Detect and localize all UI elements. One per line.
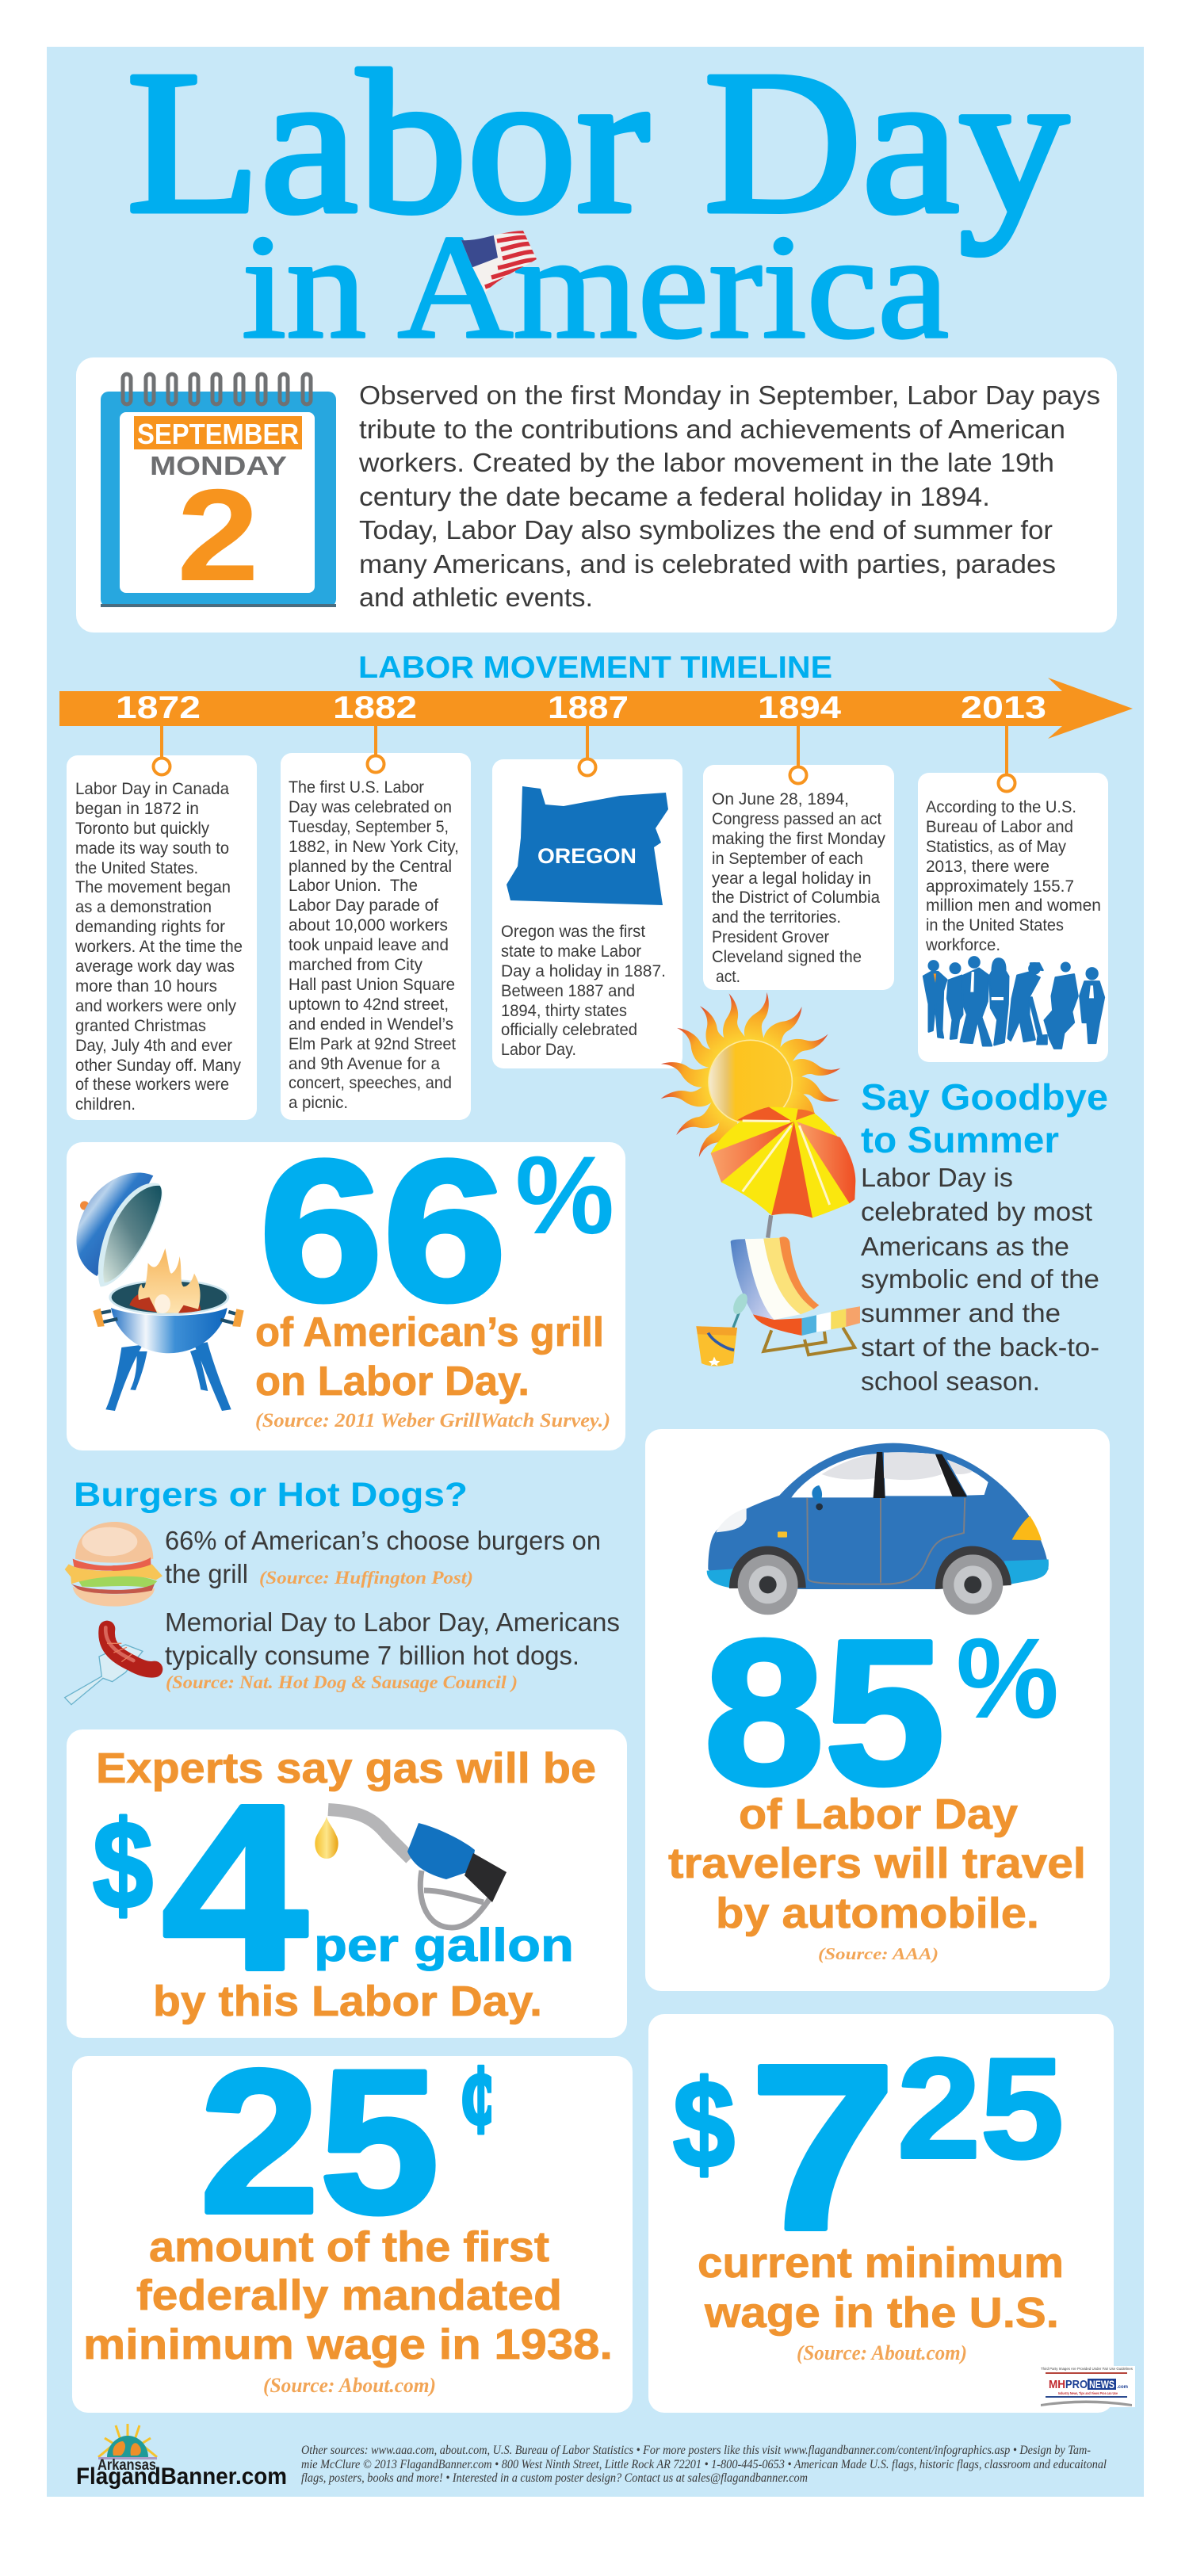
panel: current minimum wage stat <box>648 2014 1114 2413</box>
say goodbye to summer heading: to Summer <box>861 1119 1059 1160</box>
footer sources text: Other sources: www.aaa.com, about.com, U.S. Bureau of Labor Statistics • For more posters like this visit www.flagandbanner.com/content/infographics.asp • Design by Tam- <box>301 2444 1091 2457</box>
gas caption: by this Labor Day. <box>153 1978 542 2025</box>
logo: MHProNews badge: Industry News, Tips and Views Pros can Use <box>1058 2391 1118 2395</box>
big number $4: 4 <box>162 1756 309 2020</box>
logo: MHProNews badge: NEWS <box>1089 2378 1114 2391</box>
burger text: the grill <box>165 1559 248 1588</box>
intro text <box>358 380 1100 612</box>
panel: timeline card 1882: took unpaid leave and <box>289 935 449 954</box>
gas caption: per gallon <box>314 1920 574 1971</box>
say goodbye text block: Labor Day is <box>861 1163 1013 1192</box>
panel: timeline card 1872: more than 10 hours <box>75 977 217 996</box>
panel: timeline card 2013: million men and women <box>926 896 1101 915</box>
panel: intro <box>76 357 1117 633</box>
car caption: by automobile. <box>716 1890 1039 1937</box>
say goodbye text block: Americans as the <box>861 1232 1069 1261</box>
icon: worker silhouettes <box>923 957 1104 1049</box>
panel: timeline card 1882: planned by the Central <box>289 857 452 876</box>
panel: timeline card 1887: Between 1887 and <box>501 981 635 1000</box>
gas headline: Experts say gas will be <box>96 1745 596 1792</box>
logo: MHProNews badge: .com <box>1117 2385 1128 2390</box>
panel: timeline card 1894: the District of Columbia <box>712 888 880 907</box>
current wage caption: (Source: About.com) <box>797 2341 967 2364</box>
big number 25 cents: 25 <box>200 2027 439 2256</box>
car caption: (Source: AAA) <box>818 1944 939 1963</box>
icon: hot dog on fork <box>65 1627 155 1705</box>
say goodbye to summer heading <box>861 1076 1108 1160</box>
panel: timeline card 1887: state to make Labor <box>501 942 641 961</box>
grill caption: of American’s grill <box>255 1309 604 1355</box>
icon: burger <box>65 1522 162 1607</box>
panel: timeline card 1894: year a legal holiday in <box>712 869 871 888</box>
logo: Arkansas Flag and Banner <box>76 2424 287 2490</box>
panel: timeline card 1872: children. <box>75 1095 136 1114</box>
panel: timeline card 1882: uptown to 42nd street, <box>289 995 449 1014</box>
wage caption: amount of the first <box>149 2223 549 2271</box>
icon: american flag <box>461 231 537 292</box>
panel: timeline card 1872: Day, July 4th and ever <box>75 1036 232 1055</box>
panel: timeline card 1887: officially celebrated <box>501 1020 637 1039</box>
panel: timeline card 1894: and the territories. <box>712 908 841 927</box>
say goodbye text block: celebrated by most <box>861 1197 1092 1226</box>
icon: calendar: 2 <box>177 462 259 608</box>
panel: timeline card 1894: On June 28, 1894, <box>712 789 849 808</box>
icon: sun <box>658 990 843 1166</box>
burger text: 66% of American’s choose burgers on <box>165 1526 601 1555</box>
panel: timeline card 1894: President Grover <box>712 927 829 946</box>
panel: timeline card 1882: a picnic. <box>289 1093 348 1112</box>
big number 25 cents: ¢ <box>461 2045 499 2153</box>
panel: timeline card 1887: Labor Day. <box>501 1040 576 1059</box>
timeline years: 1872 <box>116 690 201 725</box>
big number 85% <box>704 1598 1059 1828</box>
icon: logo sun globe <box>98 2424 157 2459</box>
icon: oregon state map <box>507 786 668 905</box>
intro text: Today, Labor Day also symbolizes the end of summer for <box>359 515 1053 545</box>
burger text: (Source: Huffington Post) <box>259 1568 473 1588</box>
panel: timeline card 1872: average work day was <box>75 957 235 976</box>
panel: timeline card 1882: Tuesday, September 5, <box>289 817 449 836</box>
timeline arrow <box>59 678 1133 739</box>
panel: timeline card 2013: Bureau of Labor and <box>926 817 1073 836</box>
wage caption: federally mandated <box>136 2272 562 2319</box>
say goodbye to summer heading: Say Goodbye <box>861 1076 1108 1118</box>
big number $7.25: 25 <box>897 2029 1064 2188</box>
icon: umbrella <box>711 1107 855 1238</box>
panel: timeline card 2013: in the United States <box>926 915 1064 934</box>
panel: timeline card 2013: 2013, there were <box>926 857 1049 876</box>
icon: calendar: SEPTEMBER <box>137 418 299 450</box>
panel: timeline card 1872: The movement began <box>75 877 231 896</box>
logo: MHProNews badge: PRO <box>1065 2378 1088 2391</box>
panel: timeline card 1872: made its way south to <box>75 839 229 858</box>
say goodbye text block: start of the back-to- <box>861 1332 1099 1362</box>
hot dog text: Memorial Day to Labor Day, Americans <box>165 1607 620 1637</box>
icon: beach sun, umbrella, chair, bucket <box>658 990 860 1366</box>
timeline years: 2013 <box>961 690 1046 725</box>
car caption: of Labor Day <box>739 1791 1018 1838</box>
timeline years: 1887 <box>548 690 629 725</box>
panel: timeline card 1882: 1882, in New York City, <box>289 837 459 856</box>
timeline years <box>116 690 1046 725</box>
timeline heading: LABOR MOVEMENT TIMELINE <box>358 651 832 685</box>
panel: gas price stat <box>67 1729 627 2038</box>
hot dog text: typically consume 7 billion hot dogs. <box>165 1641 579 1670</box>
big number $7.25 <box>673 2016 1064 2280</box>
panel: timeline card 1882: Hall past Union Square <box>289 975 455 994</box>
current wage caption: wage in the U.S. <box>704 2289 1059 2337</box>
big number 66%: 66 <box>259 1118 507 1343</box>
icon: grill <box>76 1172 244 1411</box>
icon: car <box>707 1443 1049 1615</box>
panel: timeline card 1894 <box>703 765 894 990</box>
panel: timeline card 1887 <box>492 759 682 1068</box>
timeline years: 1882 <box>333 690 417 725</box>
big number $7.25: $ <box>673 2055 735 2194</box>
big number $7.25: 7 <box>749 2016 897 2280</box>
footer sources text <box>301 2444 1107 2485</box>
footer sources text: flags, posters, books and more! • Interested in a custom poster design? Contact us at sales@flagandbanner.com <box>301 2471 808 2485</box>
panel: timeline card 1882: concert, speeches, and <box>289 1073 452 1092</box>
panel: timeline card 1887: Day a holiday in 1887. <box>501 961 666 980</box>
heading: Burgers or Hot Dogs? <box>74 1476 468 1514</box>
panel: timeline card 1872: workers. At the time the <box>75 937 243 956</box>
panel: timeline card 1894: act. <box>716 967 740 986</box>
panel: timeline card 1882 <box>281 753 471 1120</box>
grill caption: on Labor Day. <box>255 1359 530 1405</box>
say goodbye text block <box>861 1163 1099 1396</box>
panel: timeline card 1894: Cleveland signed the <box>712 947 862 966</box>
panel: timeline card 2013: Statistics, as of May <box>926 837 1066 856</box>
logo: MHProNews badge: Third Party Images Are Provided Under Fair Use Guidelines <box>1041 2367 1134 2371</box>
panel: timeline card 2013: workforce. <box>925 935 1000 954</box>
intro text: century the date became a federal holiday in 1894. <box>359 482 990 511</box>
panel: grill stat <box>67 1118 625 1450</box>
logo: Arkansas Flag and Banner: Arkansas <box>97 2457 156 2474</box>
gas caption <box>153 1920 574 2025</box>
grill caption <box>255 1309 610 1431</box>
logo: MHProNews badge: MH <box>1049 2378 1065 2391</box>
panel: timeline card 1872: the United States. <box>75 858 198 877</box>
panel: timeline card 1872 <box>67 755 257 1120</box>
intro text: and athletic events. <box>359 583 593 612</box>
panel: timeline card 1872: demanding rights for <box>75 917 225 936</box>
big number $4 <box>93 1756 309 2020</box>
title <box>127 29 1069 369</box>
panel: timeline card 1887: 1894, thirty states <box>501 1001 627 1020</box>
timeline years: 1894 <box>758 690 842 725</box>
title: Labor Day <box>127 29 1069 255</box>
timeline connectors and markers <box>154 726 1015 791</box>
panel: timeline card 1872: Labor Day in Canada <box>75 779 229 798</box>
panel: timeline card 2013 <box>918 773 1108 1062</box>
panel: timeline card 1882: about 10,000 workers <box>289 915 448 934</box>
burger text <box>165 1526 601 1588</box>
icon: sand bucket <box>696 1291 751 1366</box>
panel: timeline card 1894: in September of each <box>712 849 863 868</box>
panel: timeline card 1887: Oregon was the first <box>501 922 645 941</box>
intro text: Observed on the first Monday in September, Labor Day pays <box>359 380 1100 410</box>
icon: oregon state map: OREGON <box>537 844 637 868</box>
big number $4: $ <box>93 1796 153 1935</box>
panel: timeline card 1882: Labor Union. The <box>289 876 418 895</box>
icon: beach chair <box>731 1236 860 1355</box>
panel: timeline card 1872: began in 1872 in <box>75 799 199 818</box>
title: in America <box>242 204 949 369</box>
hot dog text <box>165 1607 620 1692</box>
panel: timeline card 1882: Day was celebrated on <box>289 797 452 816</box>
logo: Arkansas Flag and Banner: FlagandBanner.com <box>76 2463 287 2490</box>
intro text: workers. Created by the labor movement in the late 19th <box>358 448 1054 477</box>
hot dog text: (Source: Nat. Hot Dog & Sausage Council ) <box>166 1672 518 1692</box>
icon: calendar: MONDAY <box>150 451 287 480</box>
panel: timeline card 1882: Labor Day parade of <box>289 896 438 915</box>
big number 25 cents <box>205 2064 491 2216</box>
panel: car stat <box>645 1429 1110 1991</box>
big number 85%: % <box>956 1615 1059 1742</box>
panel: timeline card 1872: other Sunday off. Many <box>75 1056 241 1075</box>
panel: timeline card 2013: According to the U.S. <box>926 797 1076 816</box>
icon: gas nozzle <box>315 1810 507 1928</box>
panel: timeline card 1872: as a demonstration <box>75 897 212 916</box>
panel: timeline card 1882: and 9th Avenue for a <box>289 1054 440 1073</box>
panel: timeline card 1894: making the first Monday <box>712 829 885 848</box>
logo: MHProNews badge <box>1039 2366 1135 2407</box>
say goodbye text block: symbolic end of the <box>861 1264 1099 1294</box>
panel: burgers or hot dogs <box>65 1476 620 1705</box>
panel: timeline card 1882: Elm Park at 92nd Street <box>289 1034 456 1053</box>
panel: timeline card 1872: and workers were only <box>75 996 236 1015</box>
wage caption: (Source: About.com) <box>263 2374 436 2397</box>
panel: first minimum wage stat <box>72 2027 633 2413</box>
car caption <box>668 1791 1086 1963</box>
grill caption: (Source: 2011 Weber GrillWatch Survey.) <box>255 1410 610 1431</box>
panel: timeline card 1894: Congress passed an act <box>712 809 881 828</box>
panel: timeline card 1882: The first U.S. Labor <box>289 778 424 797</box>
panel: timeline card 1872: Toronto but quickly <box>75 819 209 838</box>
panel: timeline card 1882: marched from City <box>289 955 422 974</box>
panel: timeline card 1872: granted Christmas <box>75 1016 206 1035</box>
say goodbye text block: school season. <box>861 1366 1040 1396</box>
big number 85%: 85 <box>704 1598 945 1828</box>
panel: timeline card 1882: and ended in Wendel’s <box>289 1015 453 1034</box>
big number 66% <box>259 1118 614 1343</box>
intro text: many Americans, and is celebrated with parties, parades <box>359 549 1056 579</box>
panel: timeline card 2013: approximately 155.7 <box>926 877 1074 896</box>
footer sources text: mie McClure © 2013 FlagandBanner.com • 800 West Ninth Street, Little Rock AR 72201 • 1-800-445-0653 • American Made U.S. flags, historic flags, classroom and educaitonal <box>301 2458 1107 2471</box>
say goodbye text block: summer and the <box>861 1298 1061 1328</box>
current wage caption: current minimum <box>698 2239 1064 2287</box>
current wage caption <box>698 2239 1064 2364</box>
intro text: tribute to the contributions and achievements of American <box>359 415 1065 444</box>
wage caption: minimum wage in 1938. <box>83 2321 613 2368</box>
car caption: travelers will travel <box>668 1840 1086 1887</box>
icon: calendar <box>101 374 336 608</box>
big number 66%: % <box>515 1133 614 1257</box>
panel: timeline card 1872: of these workers were <box>75 1075 229 1094</box>
wage caption <box>83 2223 613 2397</box>
